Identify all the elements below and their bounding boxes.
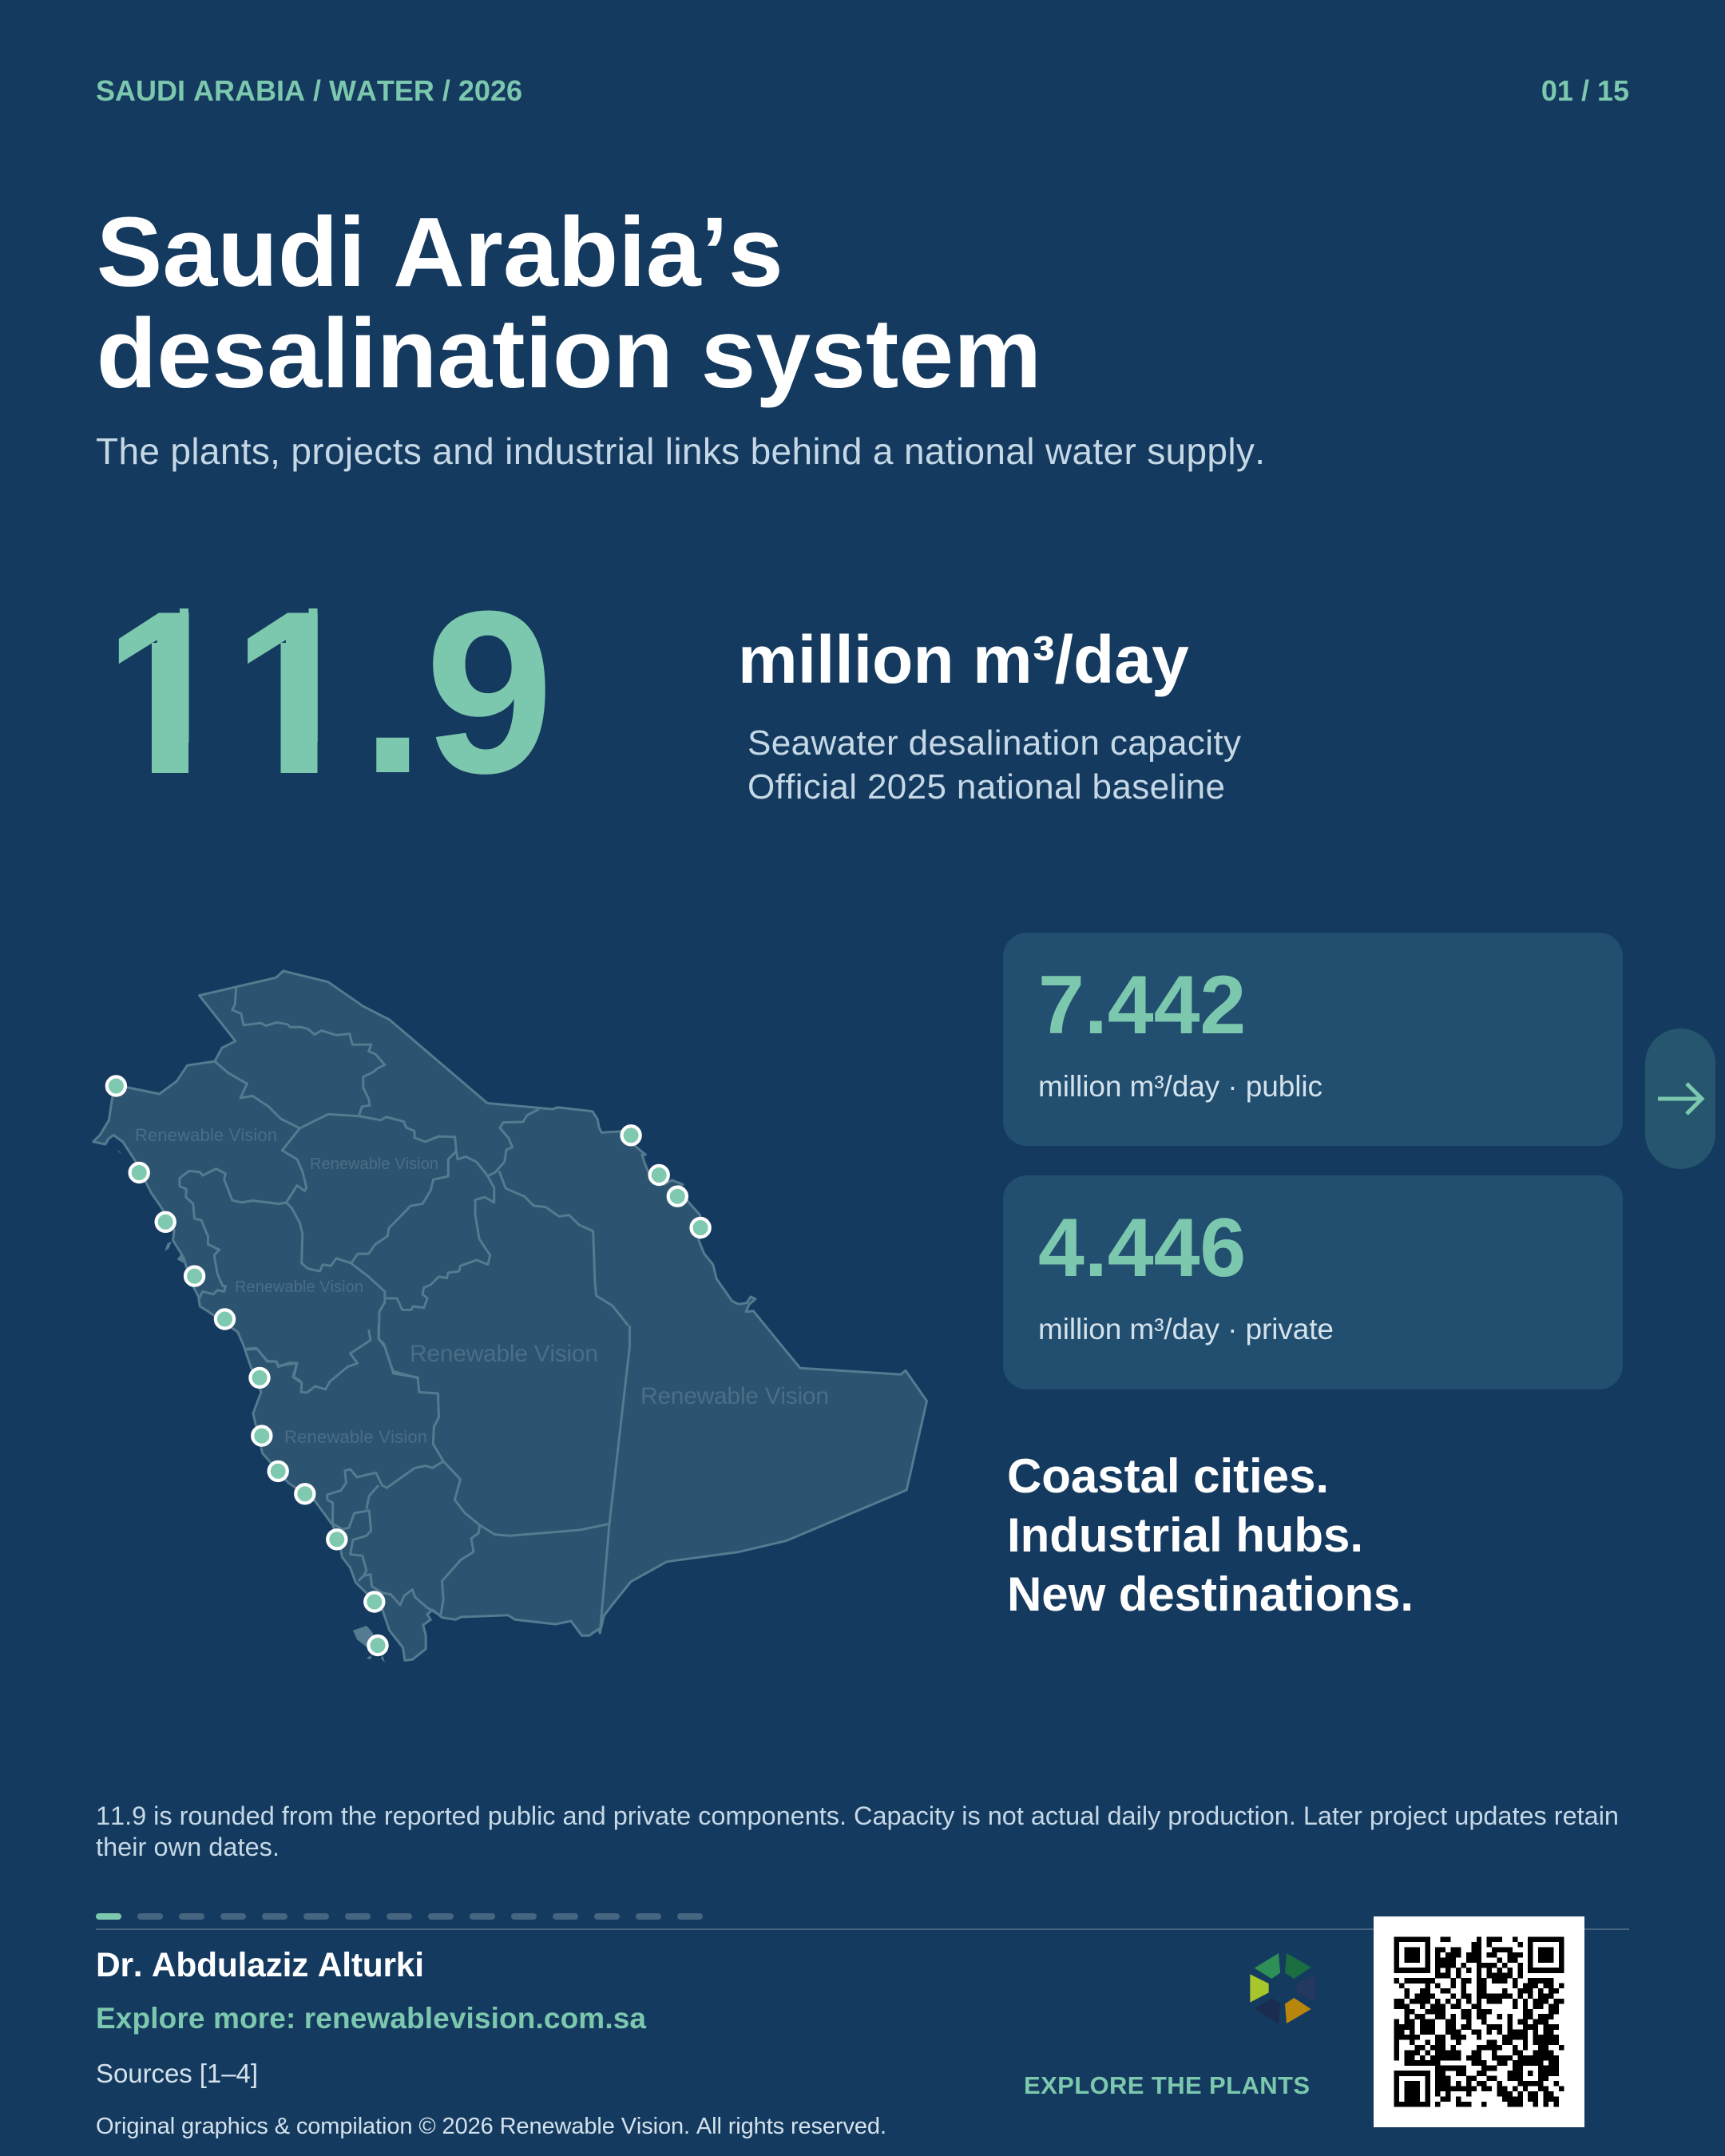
header kicker: SAUDI ARABIA / WATER / 2026	[96, 74, 522, 107]
hero description	[748, 723, 1241, 807]
icon: next arrow	[1645, 1028, 1715, 1169]
tagline: Coastal cities.	[1007, 1449, 1329, 1503]
southern region borders	[246, 1326, 629, 1633]
footnote: their own dates.	[96, 1833, 280, 1861]
title: desalination system	[97, 299, 1041, 409]
hero description: Seawater desalination capacity	[748, 723, 1241, 763]
tagline: Industrial hubs.	[1007, 1508, 1363, 1562]
map watermarks: Renewable Vision	[284, 1427, 427, 1447]
call to action: EXPLORE THE PLANTS	[1024, 2071, 1310, 2099]
copyright: Original graphics & compilation © 2026 Renewable Vision. All rights reserved.	[96, 2114, 886, 2139]
map watermarks: Renewable Vision	[135, 1125, 277, 1145]
website link: Explore more: renewablevision.com.sa	[96, 2002, 646, 2035]
hero number: 11.9	[103, 563, 553, 822]
QR code	[1374, 1916, 1584, 2127]
title: Saudi Arabia’s	[97, 197, 783, 307]
map islands	[117, 1149, 385, 1663]
map watermarks: Renewable Vision	[410, 1341, 598, 1367]
subtitle: The plants, projects and industrial links behind a national water supply.	[96, 430, 1265, 472]
map watermarks: Renewable Vision	[640, 1383, 829, 1409]
map watermarks: Renewable Vision	[235, 1278, 363, 1296]
eastern region borders	[488, 1109, 629, 1326]
tagline	[1007, 1449, 1414, 1621]
map watermarks: Renewable Vision	[310, 1155, 438, 1173]
title	[97, 197, 1041, 409]
panel: private capacity card: 4.446	[1038, 1202, 1246, 1294]
hero description: Official 2025 national baseline	[748, 767, 1225, 807]
panel: public capacity card: 7.442	[1038, 959, 1246, 1052]
plant site markers	[107, 1076, 710, 1655]
northern region borders	[180, 986, 494, 1381]
panel: public capacity card: million m³/day · public	[1038, 1070, 1322, 1103]
panel: public capacity card	[1003, 933, 1623, 1146]
tagline: New destinations.	[1007, 1567, 1414, 1621]
map outline	[93, 971, 926, 1660]
hero unit: million m³/day	[738, 622, 1189, 697]
icon: Renewable Vision logo	[1250, 1953, 1315, 2023]
panel: private capacity card	[1003, 1175, 1623, 1389]
sources: Sources [1–4]	[96, 2059, 258, 2088]
footnote	[96, 1801, 1619, 1861]
author name: Dr. Abdulaziz Alturki	[96, 1947, 424, 1984]
progress dashes	[96, 1913, 703, 1920]
map watermarks	[135, 1125, 829, 1447]
page number: 01 / 15	[1541, 74, 1629, 107]
panel: private capacity card: million m³/day · private	[1038, 1313, 1334, 1346]
map of Saudi Arabia with desalination sites	[93, 971, 926, 1663]
footnote: 11.9 is rounded from the reported public and private components. Capacity is not actual daily production. Later project updates retain	[96, 1801, 1619, 1830]
